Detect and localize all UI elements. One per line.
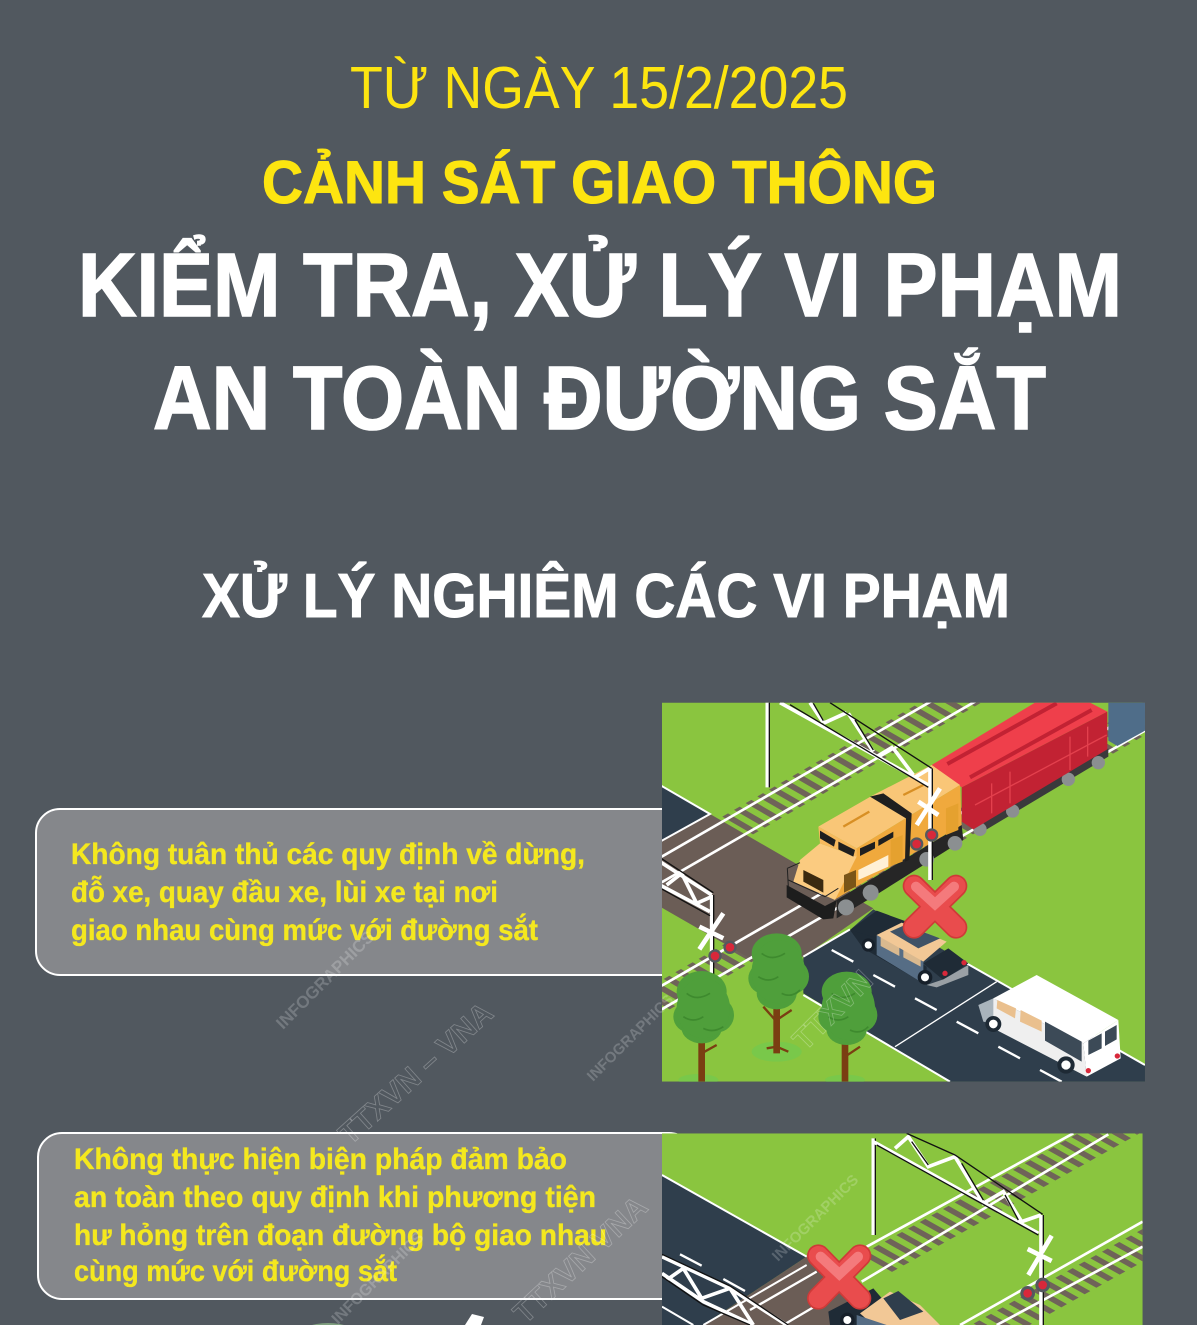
- gantry: right: [873, 1133, 1043, 1325]
- heading: traffic police: CẢNH SÁT GIAO THÔNG: [262, 149, 937, 216]
- icon: van: [978, 975, 1121, 1077]
- text block: violation 1: giao nhau cùng mức với đường sắt: [71, 913, 538, 947]
- watermarks: INFOGRAPHICS: [584, 991, 677, 1085]
- track ties: [662, 702, 1145, 1010]
- date heading: TỪ NGÀY 15/2/2025: [350, 55, 848, 121]
- rails: [862, 1133, 1143, 1325]
- icon: red cross: [914, 886, 956, 927]
- road and crossing: [662, 1174, 848, 1325]
- watermarks: TTXVN: [787, 964, 879, 1057]
- text block: violation 1: đỗ xe, quay đầu xe, lùi xe tại nơi: [71, 875, 498, 909]
- watermarks: TTXVN – VNA: [333, 996, 500, 1151]
- crossing sign and lights: [699, 788, 940, 963]
- bottom illustration fragments: [298, 1314, 484, 1325]
- watermarks: INFOGRAPHICS: [329, 1229, 428, 1325]
- road and crossing: [660, 785, 1145, 1082]
- main title line 2: AN TOÀN ĐƯỜNG SẮT: [153, 347, 1046, 449]
- panel: violation 2 text: [38, 1133, 693, 1299]
- icon: red cross: [818, 1256, 860, 1298]
- icon: sedan: [828, 1288, 940, 1325]
- text block: violation 2: hư hỏng trên đoạn đường bộ giao nhau: [74, 1219, 607, 1252]
- watermarks: INFOGRAPHICS: [272, 927, 378, 1033]
- panel: violation 2 illustration: [662, 1133, 1143, 1325]
- locomotive: [787, 765, 963, 919]
- text block: violation 1: [71, 838, 585, 947]
- title block: [78, 55, 1122, 449]
- text block: violation 2: cùng mức với đường sắt: [74, 1254, 397, 1288]
- gantry: left: [660, 859, 714, 975]
- tanker car: [1108, 703, 1145, 746]
- red wagon: [932, 703, 1108, 836]
- rails: [662, 701, 1150, 1009]
- panel: violation 1 text: [36, 809, 686, 975]
- panel: violation 1 illustration: [662, 702, 1145, 1082]
- track ties: [870, 1134, 1142, 1325]
- text block: violation 2: an toàn theo quy định khi phương tiện: [74, 1181, 596, 1214]
- icon: sedan: [850, 911, 968, 987]
- trees: [673, 933, 877, 1086]
- crossing sign and lights: [1020, 1236, 1052, 1301]
- section heading: XỬ LÝ NGHIÊM CÁC VI PHẠM: [202, 562, 1010, 631]
- gantry: right: [767, 703, 932, 880]
- watermarks: INFOGRAPHICS: [769, 1171, 862, 1265]
- gantry: left: [662, 1254, 788, 1325]
- watermarks: [272, 927, 879, 1325]
- text block: violation 1: Không tuân thủ các quy định về dừng,: [71, 838, 585, 871]
- text block: violation 2: [74, 1143, 607, 1288]
- text block: violation 2: Không thực hiện biện pháp đảm bảo: [74, 1143, 567, 1176]
